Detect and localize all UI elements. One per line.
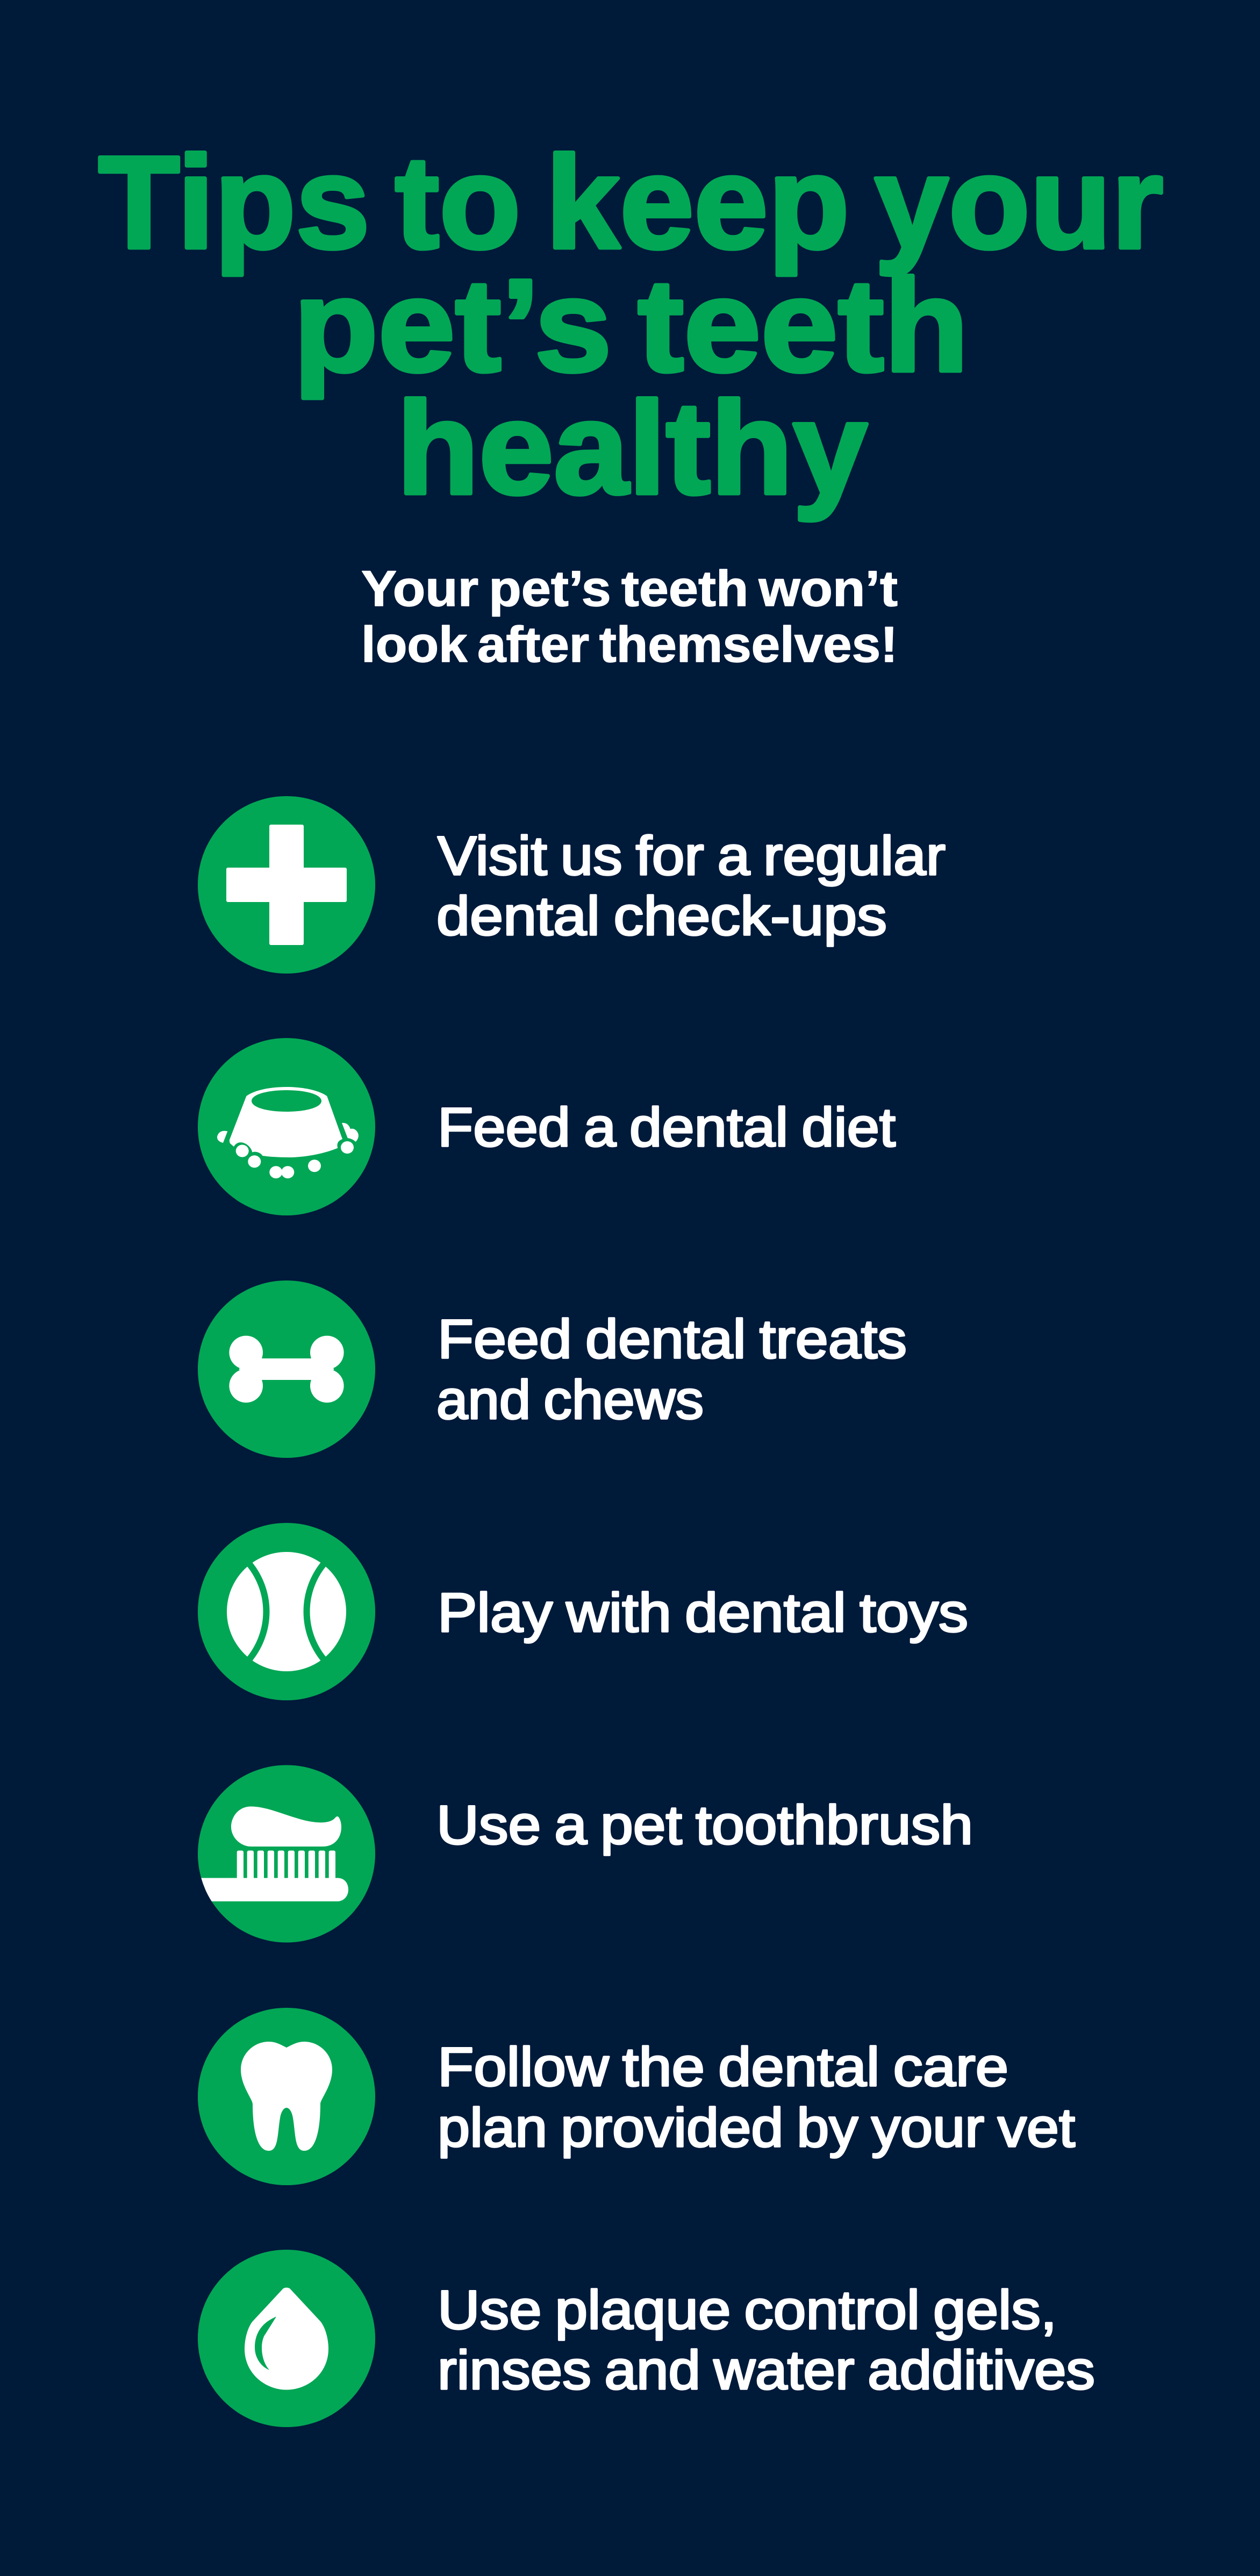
subtitle: [361, 560, 898, 672]
tip 4 text: Play with dental toys: [438, 1582, 968, 1643]
tip 4: dental toys: [198, 1523, 968, 1700]
tip 3 text: Feed dental treats: [438, 1308, 907, 1370]
tip 3 text: [436, 1308, 907, 1430]
tip 2: dental diet: [198, 1038, 896, 1215]
tip 7: gels, rinses and additives: [198, 2250, 1095, 2427]
icon: food bowl with kibble: [198, 1038, 375, 1215]
tip 7 text: [438, 2279, 1095, 2401]
tip 6: dental care plan: [198, 2008, 1075, 2185]
icon: water drop: [198, 2250, 375, 2427]
tip 1 text: dental check-ups: [436, 885, 887, 947]
tip 1 text: [436, 825, 946, 947]
icon: tennis ball: [198, 1523, 375, 1700]
title: pet’s teeth: [293, 252, 969, 399]
title: Tips to keep your: [98, 128, 1163, 276]
tip 7 text: Use plaque control gels,: [438, 2279, 1057, 2341]
title: healthy: [397, 374, 868, 521]
icon: bone: [198, 1280, 375, 1458]
icon: toothbrush with paste: [198, 1765, 375, 1943]
tip 2 text: Feed a dental diet: [438, 1097, 896, 1158]
subtitle: look after themselves!: [361, 616, 898, 672]
tip 7 text: rinses and water additives: [438, 2339, 1095, 2401]
title: [98, 128, 1163, 521]
tip 1 text: Visit us for a regular: [438, 825, 946, 886]
subtitle: Your pet’s teeth won’t: [361, 560, 898, 617]
tip 6 text: plan provided by your vet: [438, 2097, 1075, 2158]
tip 3: treats and chews: [198, 1280, 907, 1458]
icon: medical cross: [198, 796, 375, 974]
tip 3 text: and chews: [436, 1369, 704, 1430]
tip 5: pet toothbrush: [198, 1765, 973, 1943]
tip 5 text: Use a pet toothbrush: [436, 1794, 973, 1856]
tip 6 text: [438, 2036, 1075, 2158]
tip 6 text: Follow the dental care: [438, 2036, 1008, 2098]
icon: tooth: [198, 2008, 375, 2185]
tip 1: dental check-ups: [198, 796, 946, 974]
